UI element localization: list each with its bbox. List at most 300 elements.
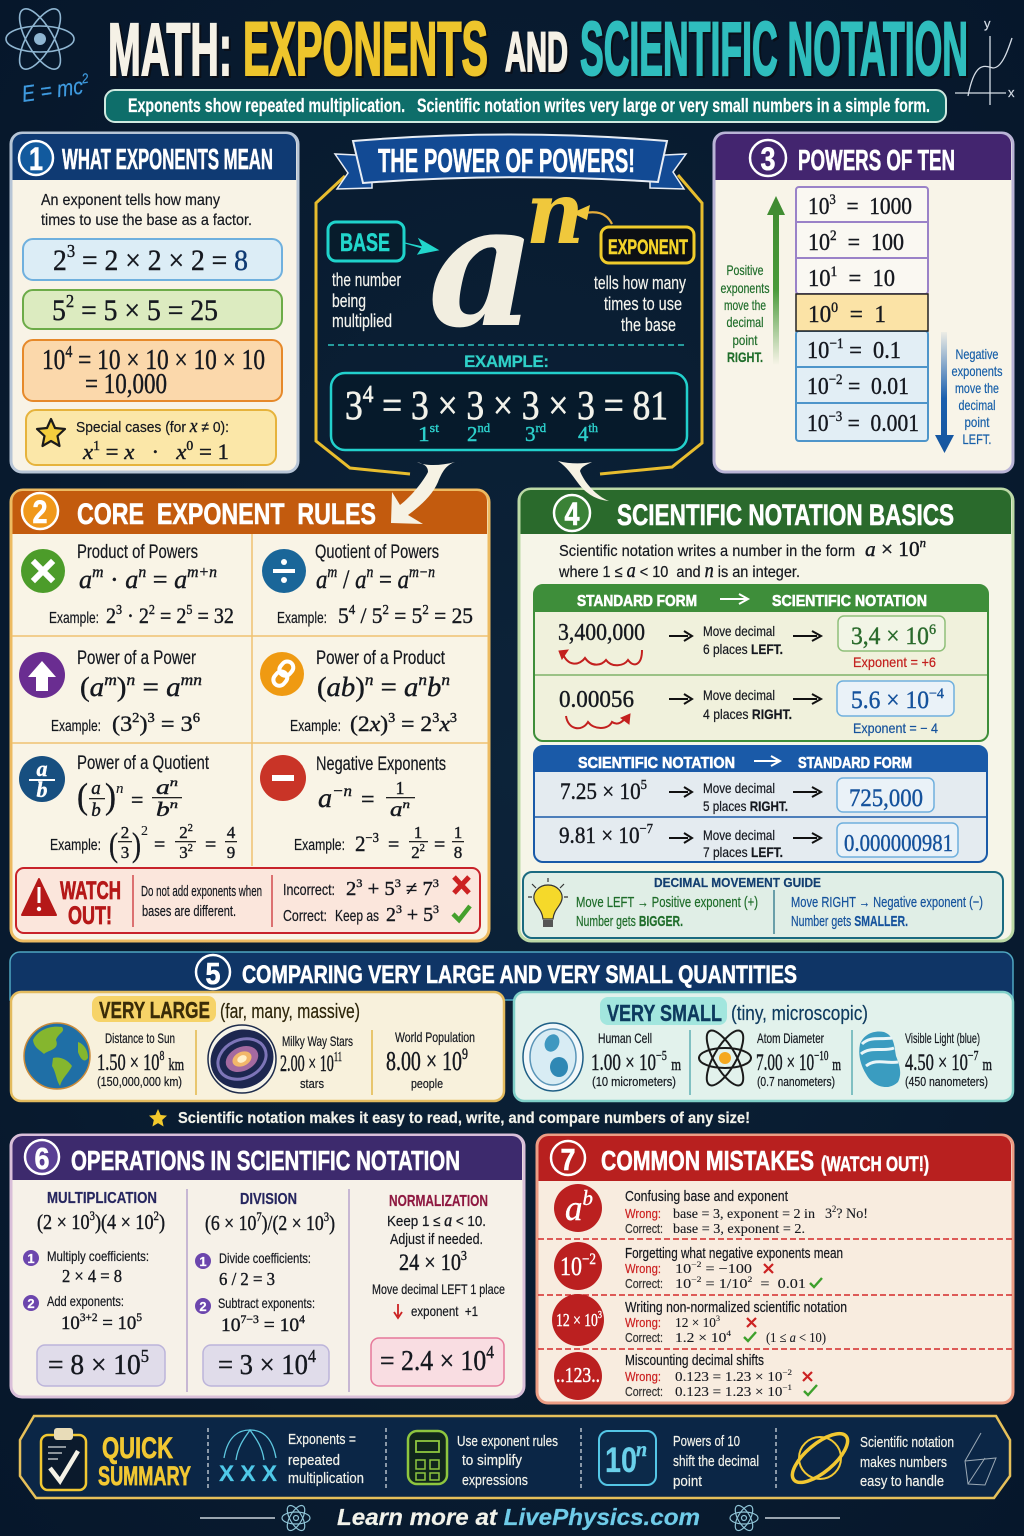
callout: watch out: Incorrect:: [283, 882, 335, 899]
decimal movement guide: Number gets SMALLER.: [791, 913, 908, 930]
big formula a to the n: n: [526, 163, 584, 264]
rule: power of a quotient: =: [205, 834, 216, 856]
column: division: (6 × 107)/(2 × 103): [205, 1210, 335, 1235]
mistake 1: [554, 1184, 868, 1236]
callout: watch out: Keep as: [335, 908, 379, 925]
icon: minus: [260, 755, 306, 801]
rule: power of a quotient: [19, 753, 237, 864]
footer: [200, 1503, 840, 1533]
row: 3,400,000: [558, 616, 945, 670]
rule: power of a quotient: =: [131, 787, 143, 812]
rule: product of powers: 23 · 22 = 25 = 32: [106, 602, 234, 628]
summary: powers of 10: point: [673, 1473, 703, 1490]
column: multiplication: Add exponents:: [47, 1293, 124, 1309]
rule: negative exponents: 8: [454, 843, 462, 862]
rule: quotient of powers: 54 / 52 = 52 = 25: [338, 602, 473, 628]
mistake 4: Miscounting decimal shifts: [625, 1352, 764, 1369]
header 7: [538, 1136, 1011, 1181]
panel 4: scientific notation basics: [519, 489, 1013, 941]
card: very large: [11, 992, 504, 1101]
panel 5: comparing quantities: [10, 952, 1013, 1101]
number badge 5: 5: [206, 956, 220, 991]
base label: BASE: [340, 229, 390, 257]
panel: the power of powers: [316, 134, 702, 474]
column: normalization: [371, 1193, 505, 1386]
positive exponents note: decimal: [726, 314, 764, 330]
row: 0.00056: 0.00056: [559, 687, 634, 713]
badge: decimal shift: [554, 1352, 602, 1400]
badge: a to the b: [554, 1184, 602, 1232]
example: 10 to the fourth: [23, 340, 282, 401]
icon: graph axes: [955, 16, 1015, 105]
rule: power of a quotient: (: [109, 827, 118, 864]
callout: watch out: 23 + 53 ≠ 73: [346, 876, 439, 900]
column: division: Divide coefficients:: [219, 1250, 311, 1266]
row: 3,400,000: Move decimal: [703, 623, 775, 639]
rule: quotient of powers: Quotient of Powers: [315, 542, 439, 563]
powers of ten table: 101 = 10: [808, 264, 895, 292]
fact: visible light: 4.50 × 10−7 m: [905, 1048, 992, 1075]
very small label: (tiny, microscopic): [731, 1003, 868, 1025]
arrow: [720, 594, 748, 604]
icon: atom left: [282, 1503, 310, 1533]
column: normalization: = 2.4 × 104: [380, 1342, 494, 1377]
decimal movement guide: [523, 872, 1003, 938]
row: 0.00056: 4 places RIGHT.: [703, 706, 792, 722]
column: division: DIVISION: [240, 1191, 297, 1208]
summary: scientific notation easy: Scientific notation: [860, 1434, 954, 1451]
ribbon banner: THE POWER OF POWERS!: [378, 142, 635, 179]
rule: quotient of powers: am / an = am−n: [316, 564, 435, 594]
rule: power of a power: Power of a Power: [77, 648, 197, 669]
row: 0.00056: [559, 681, 954, 736]
badge: 12 x 10^3: [552, 1294, 604, 1346]
title: EXPONENTS: [243, 7, 488, 92]
rule: power of a quotient: ): [132, 827, 141, 864]
example: 10 to the fourth: 104 = 10 × 10 × 10 × 10: [42, 342, 265, 376]
example equation: 4th: [578, 421, 599, 446]
mistake 2: Correct:: [625, 1276, 663, 1291]
summary: scientific notation easy: [785, 1425, 996, 1491]
powers of ten table: 100 = 1: [808, 300, 886, 328]
rule: quotient of powers: Example:: [277, 610, 327, 627]
rule: power of a quotient: a n: [156, 775, 178, 799]
mistake 4: 0.123 = 1.23 × 10 −2: [675, 1368, 792, 1385]
summary: exponent rules: to simplify: [462, 1452, 522, 1469]
exponent description: [594, 273, 686, 335]
very large label: [92, 996, 360, 1023]
rule: negative exponents: =: [388, 834, 399, 856]
negative exponents note: decimal: [958, 397, 996, 413]
column: normalization: 24 × 103: [399, 1248, 467, 1275]
mistake 2: Wrong:: [625, 1261, 661, 1276]
number badge 7: [551, 1141, 585, 1177]
quick summary heading: [98, 1432, 191, 1491]
column: division: 1: [199, 1254, 207, 1269]
header 4: [520, 490, 1011, 534]
ribbon banner: [335, 134, 686, 189]
column: division: 2: [199, 1299, 207, 1314]
column: normalization: Keep 1 ≤ a < 10.: [387, 1210, 486, 1230]
rule: power of a quotient: (: [77, 776, 88, 816]
very large label: (far, many, massive): [220, 1001, 360, 1023]
panel: quick summary: [20, 1416, 1010, 1498]
example: 2 cubed: 23 = 2 × 2 × 2 = 8: [53, 241, 248, 277]
card: very small: [514, 992, 1013, 1101]
number badge 3: 3: [760, 141, 776, 177]
icon: graph axes: y: [984, 16, 991, 31]
column: normalization: NORMALIZATION: [389, 1193, 488, 1210]
rule: negative exponents: 2−3: [355, 830, 379, 856]
rule: power of a quotient: =: [154, 834, 165, 856]
summary: repeated multiplication: Exponents =: [288, 1431, 356, 1448]
fact: world population: World Population: [395, 1029, 475, 1045]
mistake 1: base = 3, exponent = 2.: [673, 1221, 805, 1236]
arrows from central panel: [391, 461, 609, 524]
heading 6: OPERATIONS IN SCIENTIFIC NOTATION: [71, 1145, 460, 1176]
powers of ten table: 103 = 1000: [808, 192, 912, 220]
callout: special cases: [26, 410, 276, 465]
icon: up arrow: [19, 652, 65, 698]
table: scientific to standard: STANDARD FORM: [798, 755, 912, 772]
learn more text: Learn more at LivePhysics.com: [337, 1504, 700, 1530]
number badge 1: [19, 141, 53, 177]
fact: world population: people: [411, 1076, 443, 1091]
mistake 3: Writing non-normalized scientific notation: [625, 1299, 847, 1316]
heading 5: COMPARING VERY LARGE AND VERY SMALL QUANTITIES: [242, 961, 797, 989]
table: standard to scientific: [534, 585, 988, 741]
mistake 3: 1.2 × 10 4: [675, 1329, 732, 1346]
icon: chain link: [260, 652, 304, 696]
badge: 10 to the minus 2: 10−2: [560, 1251, 596, 1281]
number badge 1: 1: [29, 141, 43, 177]
icon: times: [21, 549, 65, 593]
definition text: a × 10n: [865, 536, 926, 561]
mistake 3: 12 × 103: [675, 1314, 720, 1331]
column: multiplication: 2 × 4 = 8: [62, 1266, 122, 1286]
column: division: Subtract exponents:: [218, 1295, 315, 1311]
heading 2: CORE EXPONENT RULES: [77, 498, 376, 531]
heading 1: WHAT EXPONENTS MEAN: [62, 144, 273, 176]
panel 7: common mistakes: [537, 1135, 1013, 1403]
row: 3,400,000: Exponent = +6: [853, 654, 936, 670]
rule: negative exponents: 22: [411, 843, 425, 862]
rule: power of a quotient: ): [105, 776, 116, 816]
fact: milky way stars: 2.00 × 1011: [280, 1049, 342, 1076]
title: AND: [505, 20, 568, 83]
big formula a to the n: a: [428, 166, 536, 366]
rule: product of powers: am · an = am+n: [79, 564, 217, 594]
mistake 1: base = 3, exponent = 2 in: [673, 1206, 815, 1221]
table: scientific to standard: SCIENTIFIC NOTATION: [578, 755, 735, 772]
rule: negative exponents: 1: [396, 778, 404, 798]
arrow: exponent to n: [572, 205, 612, 224]
number badge 4: [554, 495, 590, 532]
icon: atom: [699, 1026, 751, 1090]
example equation: 1st: [418, 421, 440, 446]
icon: cell: [523, 1023, 583, 1091]
arrow: [754, 756, 780, 766]
row: 9.81 x 10^-7: 9.81 × 10−7: [559, 821, 653, 848]
fact: milky way stars: stars: [300, 1076, 324, 1091]
arrow: positive up: [767, 196, 785, 365]
intro text: An exponent tells how many: [41, 192, 220, 209]
mistake 4: 0.123 = 1.23 × 10 −1: [675, 1383, 792, 1400]
row: 0.00056: 5.6 × 10−4: [851, 686, 944, 714]
icon: warning triangle: [22, 879, 56, 915]
icon: atom with E=mc2: E = mc2: [20, 71, 91, 107]
base description: the number: [332, 270, 401, 290]
icon: star: [37, 419, 65, 446]
example label: EXAMPLE:: [464, 352, 549, 371]
arrow: to rules panel: [391, 462, 455, 524]
negative exponents note: Negative: [956, 346, 999, 362]
row: 3,400,000: 3,400,000: [558, 620, 645, 646]
rule: quotient of powers: [262, 542, 473, 628]
column: multiplication: MULTIPLICATION: [47, 1190, 157, 1207]
exponent description: tells how many: [594, 273, 686, 293]
subtitle banner: [105, 90, 946, 122]
rule: power of a product: Power of a Product: [316, 648, 446, 669]
badge: a to the b: ab: [565, 1186, 593, 1228]
row: 7.25 x 10^5: 5 places RIGHT.: [703, 798, 788, 814]
exponent label: EXPONENT: [608, 236, 688, 259]
fact: human cell: (10 micrometers): [592, 1074, 676, 1089]
table: standard to scientific: STANDARD FORM: [577, 593, 697, 610]
rule: power of a product: (2x)3 = 23x3: [350, 710, 457, 736]
mistake 4: [554, 1352, 817, 1400]
icon: ringed planet: [785, 1425, 855, 1491]
tagline: Scientific notation makes it easy to read, write, and compare numbers of any size!: [178, 1110, 750, 1127]
column: normalization: exponent +1: [411, 1303, 478, 1319]
column: normalization: Adjust if needed.: [390, 1231, 483, 1248]
fact: human cell: 1.00 × 10−5 m: [591, 1048, 681, 1075]
fact: distance to sun: 1.50 × 108 km: [97, 1048, 184, 1075]
fact: atom diameter: [756, 1030, 841, 1089]
summary: repeated multiplication: [219, 1430, 364, 1487]
summary: repeated multiplication: multiplication: [288, 1470, 364, 1487]
row: 7.25 x 10^5: [560, 777, 934, 814]
mistake 4: Wrong:: [625, 1369, 661, 1384]
rule: power of a quotient: 4: [227, 823, 236, 842]
icon: atom with E=mc2: [6, 3, 91, 107]
heading 7: (WATCH OUT!): [821, 1153, 929, 1176]
table: standard to scientific: SCIENTIFIC NOTATION: [772, 593, 927, 610]
intro text: times to use the base as a factor.: [41, 212, 252, 229]
icon: sketch: [965, 1433, 996, 1485]
rule: power of a quotient: 3: [121, 843, 129, 862]
powers of ten table: 102 = 100: [808, 228, 904, 256]
rule: power of a quotient: n: [116, 781, 124, 797]
example: 5 squared: [23, 290, 282, 329]
number badge 6: 6: [34, 1141, 50, 1176]
summary: powers of 10: [599, 1431, 759, 1490]
very small label: [600, 997, 868, 1026]
rule: negative exponents: an: [390, 797, 410, 821]
rule: negative exponents: Example:: [294, 837, 345, 854]
title: MATH:: [108, 8, 232, 91]
row: 7.25 x 10^5: Move decimal: [703, 780, 775, 796]
mistake 2: 10 −2 = −100: [675, 1260, 752, 1277]
rule: power of a quotient: Power of a Quotient: [77, 753, 210, 774]
column: division: 6 / 2 = 3: [219, 1269, 275, 1289]
title: [108, 7, 968, 92]
icon: atom right: [730, 1503, 758, 1533]
badge: decimal shift: ..123..: [556, 1363, 600, 1387]
rule: negative exponents: =: [361, 787, 375, 813]
rule: power of a quotient: b n: [156, 797, 178, 821]
arrow: base to a: [405, 239, 438, 254]
mistake 2: Forgetting what negative exponents mean: [625, 1245, 843, 1262]
icon: divide: [262, 549, 306, 593]
header 3: [716, 134, 1011, 180]
base description: multiplied: [332, 311, 392, 331]
summary: powers of 10: 10: [605, 1441, 637, 1480]
column: division: 107−3 = 104: [221, 1314, 305, 1336]
panel 6: operations: [11, 1135, 524, 1397]
decimal movement guide: Move LEFT → Positive exponent (+): [576, 894, 758, 911]
icon: clipboard: [41, 1428, 86, 1490]
powers of ten table: 10−1 = 0.1: [807, 336, 901, 364]
badge: 10 to the minus 2: [554, 1242, 602, 1290]
column: multiplication: 103+2 = 105: [61, 1312, 142, 1334]
panel 3: powers of ten: [714, 133, 1013, 472]
rule: power of a product: (ab)n = anbn: [317, 671, 450, 702]
icon: galaxy: [201, 1019, 283, 1099]
fact: human cell: Human Cell: [598, 1030, 652, 1046]
icon: light waves: [859, 1032, 900, 1087]
exponent label: [601, 227, 694, 263]
row: 3,400,000: 6 places LEFT.: [703, 641, 783, 657]
fact: atom diameter: 7.00 × 10−10 m: [756, 1048, 841, 1075]
negative exponents note: point: [964, 414, 990, 430]
rule: power of a quotient: 22: [179, 823, 193, 842]
mistake 2: 10 −2 = 1/10 2 = 0.01: [675, 1275, 806, 1292]
number badge 2: [22, 493, 58, 530]
rule: negative exponents: 1: [454, 823, 462, 842]
rule: power of a quotient: Example:: [50, 837, 101, 854]
column: multiplication: = 8 × 105: [48, 1346, 149, 1381]
icon: red cross: [454, 877, 469, 893]
rule: power of a quotient: 2: [121, 823, 129, 842]
row: 9.81 x 10^-7: 0.000000981: [844, 831, 953, 857]
summary: powers of 10: n: [636, 1439, 647, 1461]
icon: a over b: b: [36, 777, 48, 802]
rule: power of a power: Example:: [51, 718, 101, 735]
fact: human cell: [591, 1030, 681, 1089]
base label: [328, 222, 404, 261]
positive exponents note: RIGHT.: [727, 349, 763, 365]
summary: exponent rules: Use exponent rules: [457, 1433, 558, 1450]
quick summary heading: QUICK: [102, 1432, 173, 1465]
callout: watch out: Correct:: [283, 908, 327, 925]
fact: atom diameter: Atom Diameter: [757, 1030, 824, 1046]
rule: power of a product: [260, 648, 457, 736]
rule: power of a quotient: a: [91, 778, 101, 799]
summary: powers of 10: shift the decimal: [673, 1453, 759, 1470]
mistake 1: 32? No!: [825, 1204, 868, 1222]
example equation: 34 = 3 × 3 × 3 × 3 = 81: [345, 381, 668, 428]
rule: power of a product: Example:: [290, 718, 341, 735]
powers of ten table: 10−3 = 0.001: [807, 409, 919, 437]
negative exponents note: exponents: [952, 363, 1002, 379]
example equation: 2nd: [467, 421, 491, 446]
rule: negative exponents: [260, 754, 464, 862]
mistake 1: Wrong:: [625, 1206, 661, 1221]
callout: watch out: Do not add exponents when: [141, 883, 262, 900]
panel 2: core exponent rules: [11, 490, 489, 941]
row: 9.81 x 10^-7: 7 places LEFT.: [703, 844, 783, 860]
rule: power of a quotient: b: [91, 800, 101, 821]
very small label: VERY SMALL: [607, 1000, 722, 1026]
base description: [332, 270, 401, 331]
decimal movement guide: DECIMAL MOVEMENT GUIDE: [654, 876, 821, 890]
mistake 3: [552, 1294, 847, 1346]
positive exponents note: move the: [724, 297, 766, 313]
intro text: [41, 192, 252, 229]
summary: scientific notation easy: easy to handle: [860, 1473, 944, 1490]
definition text: where 1 ≤ a < 10 and n is an integer.: [558, 560, 800, 582]
summary: repeated multiplication: X X X: [219, 1461, 277, 1486]
negative exponents note: [952, 346, 1002, 447]
callout: watch out: WATCH: [60, 877, 121, 905]
example equation: 3rd: [525, 421, 547, 446]
rule: negative exponents: =: [434, 834, 445, 856]
row: 3,400,000: 3,4 × 106: [851, 622, 936, 650]
number badge 3: [750, 140, 786, 177]
arrow: to scientific notation panel: [558, 461, 609, 501]
gold frame: [316, 175, 702, 474]
column: multiplication: 2: [27, 1296, 35, 1311]
column: division: = 3 × 104: [218, 1346, 316, 1381]
fact: visible light: [905, 1030, 992, 1089]
big formula a to the n: [428, 163, 584, 366]
callout: special cases: x1 = x · x0 = 1: [82, 438, 229, 464]
rule: power of a power: (32)3 = 3 6: [112, 710, 200, 736]
fact: atom diameter: (0.7 nanometers): [757, 1074, 835, 1089]
row: 7.25 x 10^5: 7.25 × 105: [560, 777, 647, 804]
column: multiplication: [23, 1190, 165, 1386]
fact: milky way stars: [280, 1033, 353, 1091]
fact: milky way stars: Milky Way Stars: [282, 1033, 353, 1049]
example equation: [331, 373, 687, 450]
fact: distance to sun: Distance to Sun: [105, 1030, 175, 1046]
icon: light bulb: [528, 878, 568, 927]
column: multiplication: (2 × 103)(4 × 102): [37, 1209, 165, 1234]
mistake 4: Correct:: [625, 1384, 663, 1399]
rule: product of powers: [21, 542, 234, 628]
icon: a over b: [19, 756, 65, 802]
rule: negative exponents: Negative Exponents: [316, 754, 446, 775]
callout: special cases: Special cases (for x ≠ 0):: [76, 416, 229, 437]
positive exponents note: point: [732, 332, 758, 348]
number badge 2: 2: [32, 494, 48, 530]
negative exponents note: LEFT.: [962, 431, 992, 447]
callout: watch out: [16, 868, 480, 933]
icon: earth: [24, 1023, 90, 1089]
arrow: red down: [394, 1304, 402, 1318]
column: multiplication: Multiply coefficients:: [47, 1248, 149, 1264]
fact: world population: [386, 1029, 475, 1091]
column: multiplication: 1: [27, 1251, 35, 1266]
summary: exponent rules: expressions: [462, 1472, 528, 1489]
powers of ten table: 10−2 = 0.01: [807, 372, 909, 400]
row: 9.81 x 10^-7: Move decimal: [703, 827, 775, 843]
summary: powers of 10: Powers of 10: [673, 1433, 740, 1450]
callout: watch out: bases are different.: [142, 903, 236, 920]
row: 9.81 x 10^-7: [559, 821, 958, 860]
decimal movement guide: Number gets BIGGER.: [576, 913, 683, 930]
